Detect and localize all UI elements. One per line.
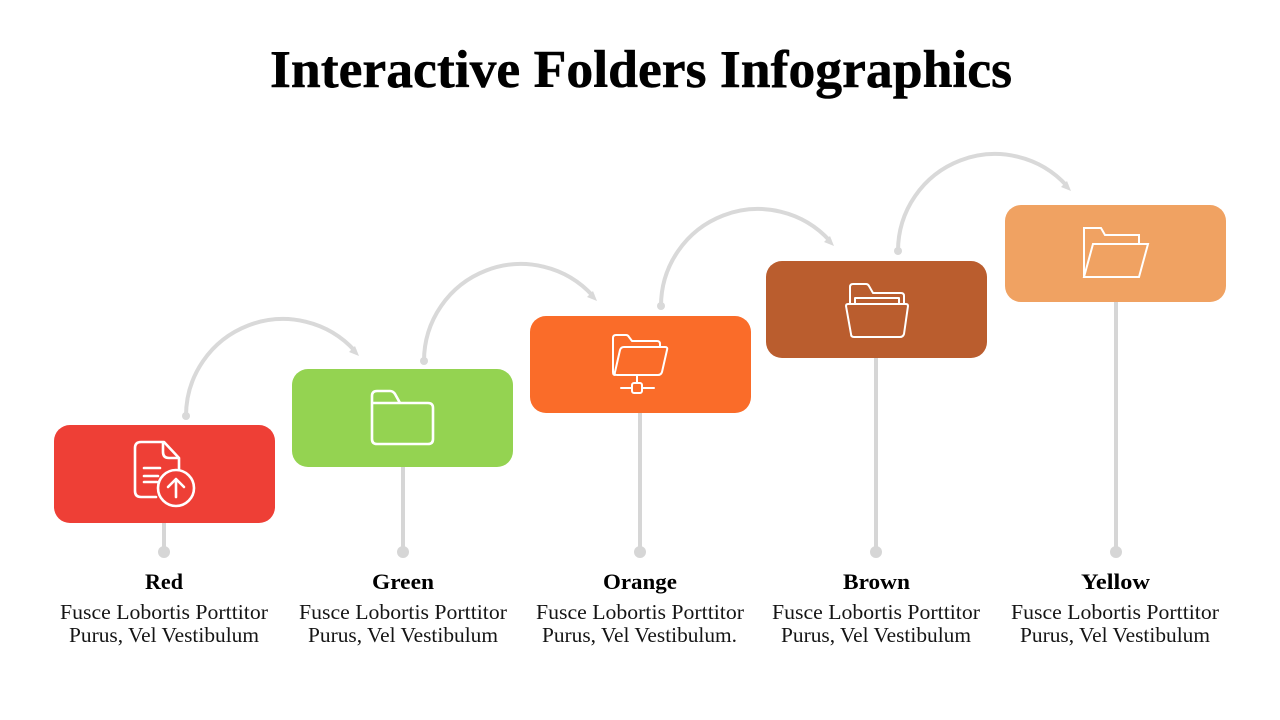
text block: orange: Fusce Lobortis Porttitor	[536, 600, 744, 624]
connector: yellow	[1110, 302, 1122, 558]
text block: red: Red	[145, 569, 183, 594]
panel: green box	[292, 369, 513, 467]
connector: red	[158, 523, 170, 558]
text block: yellow: Yellow	[1081, 569, 1150, 594]
panel: brown box	[766, 261, 987, 358]
text block: green	[299, 569, 507, 647]
panel: orange box	[530, 316, 751, 413]
text block: green: Green	[372, 569, 434, 594]
panel: yellow box	[1005, 205, 1226, 302]
text block: orange: Orange	[603, 569, 677, 594]
text block: yellow: Purus, Vel Vestibulum	[1020, 623, 1210, 647]
icon: document upload	[135, 442, 194, 506]
text block: green: Fusce Lobortis Porttitor	[299, 600, 507, 624]
text block: orange	[536, 569, 744, 647]
title: Interactive Folders Infographics	[270, 41, 1012, 99]
text block: brown: Brown	[843, 569, 910, 594]
icon: folder	[372, 391, 433, 444]
text block: brown	[772, 569, 980, 647]
connector: brown	[870, 358, 882, 558]
arrow: brown to yellow	[894, 154, 1071, 255]
icon: open folder with papers	[846, 284, 908, 337]
arrow: green to orange	[420, 264, 597, 365]
arrow: orange to brown	[657, 209, 834, 310]
text block: orange: Purus, Vel Vestibulum.	[542, 623, 737, 647]
arrow: red to green	[182, 319, 359, 420]
text block: red	[60, 569, 268, 647]
connector: orange	[634, 413, 646, 558]
icon: network folder	[613, 335, 667, 393]
text block: brown: Purus, Vel Vestibulum	[781, 623, 971, 647]
icon: open folder	[1084, 228, 1148, 277]
text block: red: Fusce Lobortis Porttitor	[60, 600, 268, 624]
text block: green: Purus, Vel Vestibulum	[308, 623, 498, 647]
connector: green	[397, 467, 409, 558]
text block: brown: Fusce Lobortis Porttitor	[772, 600, 980, 624]
text block: yellow	[1011, 569, 1219, 647]
panel: red box	[54, 425, 275, 523]
text block: red: Purus, Vel Vestibulum	[69, 623, 259, 647]
text block: yellow: Fusce Lobortis Porttitor	[1011, 600, 1219, 624]
